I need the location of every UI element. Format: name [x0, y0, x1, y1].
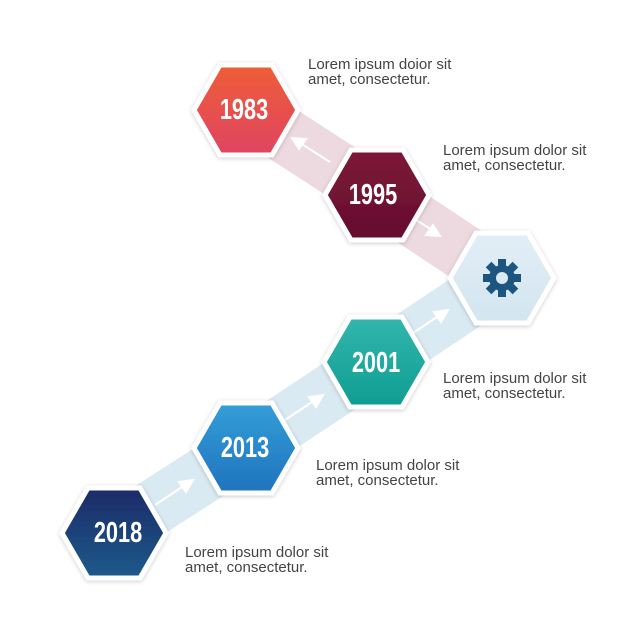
hex: 1983: [194, 65, 298, 155]
text: 2001: amet, consectetur.: [443, 385, 566, 402]
arrows: [155, 138, 448, 505]
band: upper pink connector: [246, 110, 502, 278]
icon: gear: [475, 251, 529, 305]
text: 2013: Lorem ipsum dolor sit: [316, 457, 459, 474]
hex: 1995: [325, 150, 429, 240]
text: 2018: Lorem ipsum dolor sit: [185, 544, 328, 561]
text: 1983: [308, 56, 452, 88]
hex: 2001: 2001: [352, 347, 400, 379]
hex: 2013: 2013: [221, 432, 269, 464]
hex: gear: [450, 233, 554, 323]
text: 1995: [443, 142, 586, 174]
text: 1995: Lorem ipsum dolor sit: [443, 142, 586, 159]
hex: 2013: [194, 403, 298, 493]
text: 2018: amet, consectetur.: [185, 559, 308, 576]
band: lower blue connector: [114, 278, 502, 533]
text: 1995: amet, consectetur.: [443, 157, 566, 174]
text: 2001: [443, 370, 586, 402]
text: 2018: [185, 544, 328, 576]
hex: 2001: [324, 317, 428, 407]
hex: 2018: 2018: [94, 517, 142, 549]
text: 1983: Lorem ipsum doior sit: [308, 56, 451, 73]
text: 1983: amet, consectetur.: [308, 71, 431, 88]
text: 2013: [316, 457, 460, 489]
hex: 1983: 1983: [220, 94, 268, 126]
text: 2001: Lorem ipsum dolor sit: [443, 370, 586, 387]
text: 2013: amet, consectetur.: [316, 472, 439, 489]
hex: 1995: 1995: [349, 179, 397, 211]
hex: 2018: [62, 488, 166, 578]
